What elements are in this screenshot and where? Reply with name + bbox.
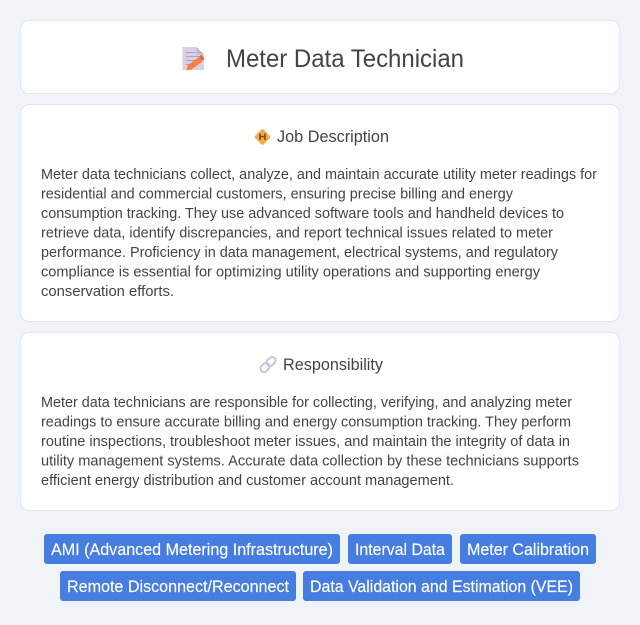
text block: job description: compliance is essential for optimizing utility operations and supporting energy [41,264,541,280]
text block: job description: retrieve data, identify discrepancies, and report technical issues related to meter [41,226,553,242]
tag: Interval Data: Interval Data [355,541,446,559]
tag: Data Validation and Estimation (VEE) [303,571,580,601]
icon: document with pencil [182,47,204,70]
text block: job description: conservation efforts. [41,284,174,300]
heading: Responsibility: Responsibility [283,356,384,374]
tag: Data Validation and Estimation (VEE): Data Validation and Estimation (VEE) [310,578,573,596]
text block: responsibility: utility management systems. Accurate data collection by these technicians supports [41,454,579,470]
tag: Interval Data [348,534,452,564]
text block: responsibility: efficient energy distribution and customer account management. [41,473,454,489]
heading: Job Description: Job Description [277,128,389,146]
text block: job description: consumption tracking. They use advanced software tools and handheld devices to [41,206,564,222]
text block: responsibility [41,395,579,489]
icon: diamond sign [254,129,271,145]
text block: job description: Meter data technicians collect, analyze, and maintain accurate utility meter readings for [41,167,597,183]
text block: responsibility: routine inspections, troubleshoot meter issues, and maintain the integrity of data in [41,434,570,450]
text block: job description: performance. Proficiency in data management, electrical systems, and regulatory [41,245,559,261]
tag: AMI [44,534,340,564]
panel: responsibility [20,332,620,510]
tag: Remote Disconnect/Reconnect [60,571,296,601]
text block: responsibility: Meter data technicians are responsible for collecting, verifying, and analyzing meter [41,395,572,411]
heading: Meter Data Technician: Meter Data Technician [226,45,464,73]
text block: job description [41,167,597,300]
tag: AMI: AMI (Advanced Metering Infrastructure) [51,541,333,559]
panel: job description [20,104,620,322]
tags [44,534,596,601]
tag: Meter Calibration: Meter Calibration [467,541,589,559]
tag: Meter Calibration [460,534,596,564]
text block: job description: residential and commercial customers, ensuring precise billing and energy [41,186,514,202]
icon: chain link [259,355,277,374]
text block: responsibility: readings to ensure accurate billing and energy consumption tracking. They perform [41,414,571,430]
tag: Remote Disconnect/Reconnect: Remote Disconnect/Reconnect [67,578,289,596]
panel: title [20,20,620,94]
